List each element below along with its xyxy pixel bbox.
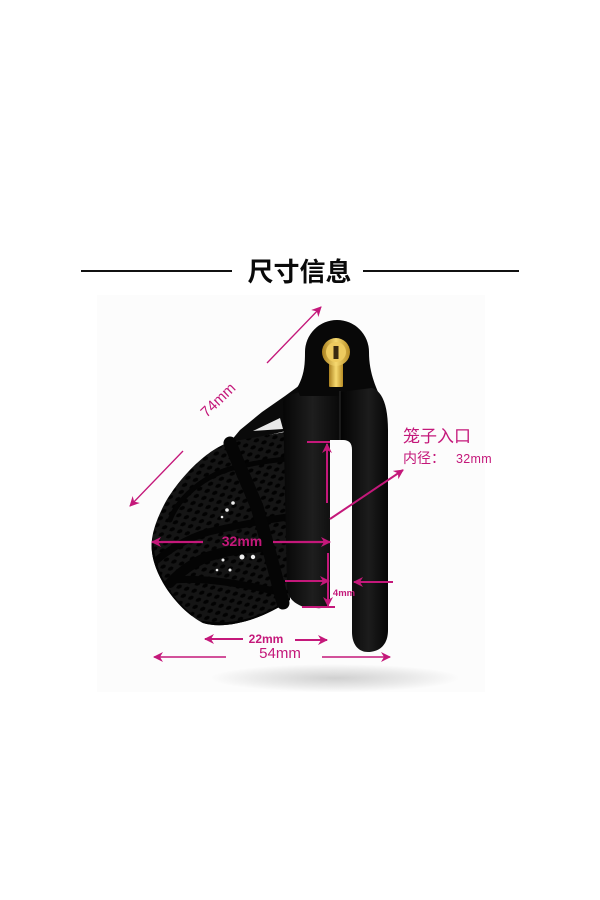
lock head	[297, 320, 378, 396]
callout: cage entrance inner diameter: 内径：	[403, 450, 445, 466]
dimension: 4mm gap: 4mm	[333, 588, 355, 599]
cage openings	[216, 501, 255, 572]
dimension: 54mm: 54mm	[259, 645, 301, 662]
photo backdrop with ground shadow	[97, 295, 485, 692]
device illustration	[152, 320, 388, 652]
dimension: 32mm depth: 32mm	[222, 533, 262, 549]
strut opening	[253, 418, 283, 431]
dimension: 74mm: 74mm	[197, 380, 239, 421]
callout: cage entrance inner diameter: 32mm	[456, 452, 492, 466]
dimension: 4mm gap	[285, 581, 393, 599]
main cross band	[230, 443, 283, 603]
dimension: 74mm	[130, 307, 321, 506]
dimension: vertical opening height	[302, 442, 335, 607]
front plate	[283, 391, 342, 608]
title heading: 尺寸信息	[247, 257, 352, 287]
dimension: 22mm: 22mm	[249, 632, 283, 646]
cage strut to lock head	[230, 385, 312, 442]
U-shaped arm	[340, 388, 388, 652]
callout: cage entrance inner diameter: 笼子入口	[403, 427, 471, 446]
cage bands	[152, 459, 290, 624]
dimension: cage entrance callout arrow	[330, 470, 403, 519]
dimension: 22mm	[205, 632, 327, 646]
callout: cage entrance inner diameter	[403, 427, 492, 466]
honeycomb cage	[152, 431, 290, 625]
gold keyhole	[322, 338, 350, 387]
